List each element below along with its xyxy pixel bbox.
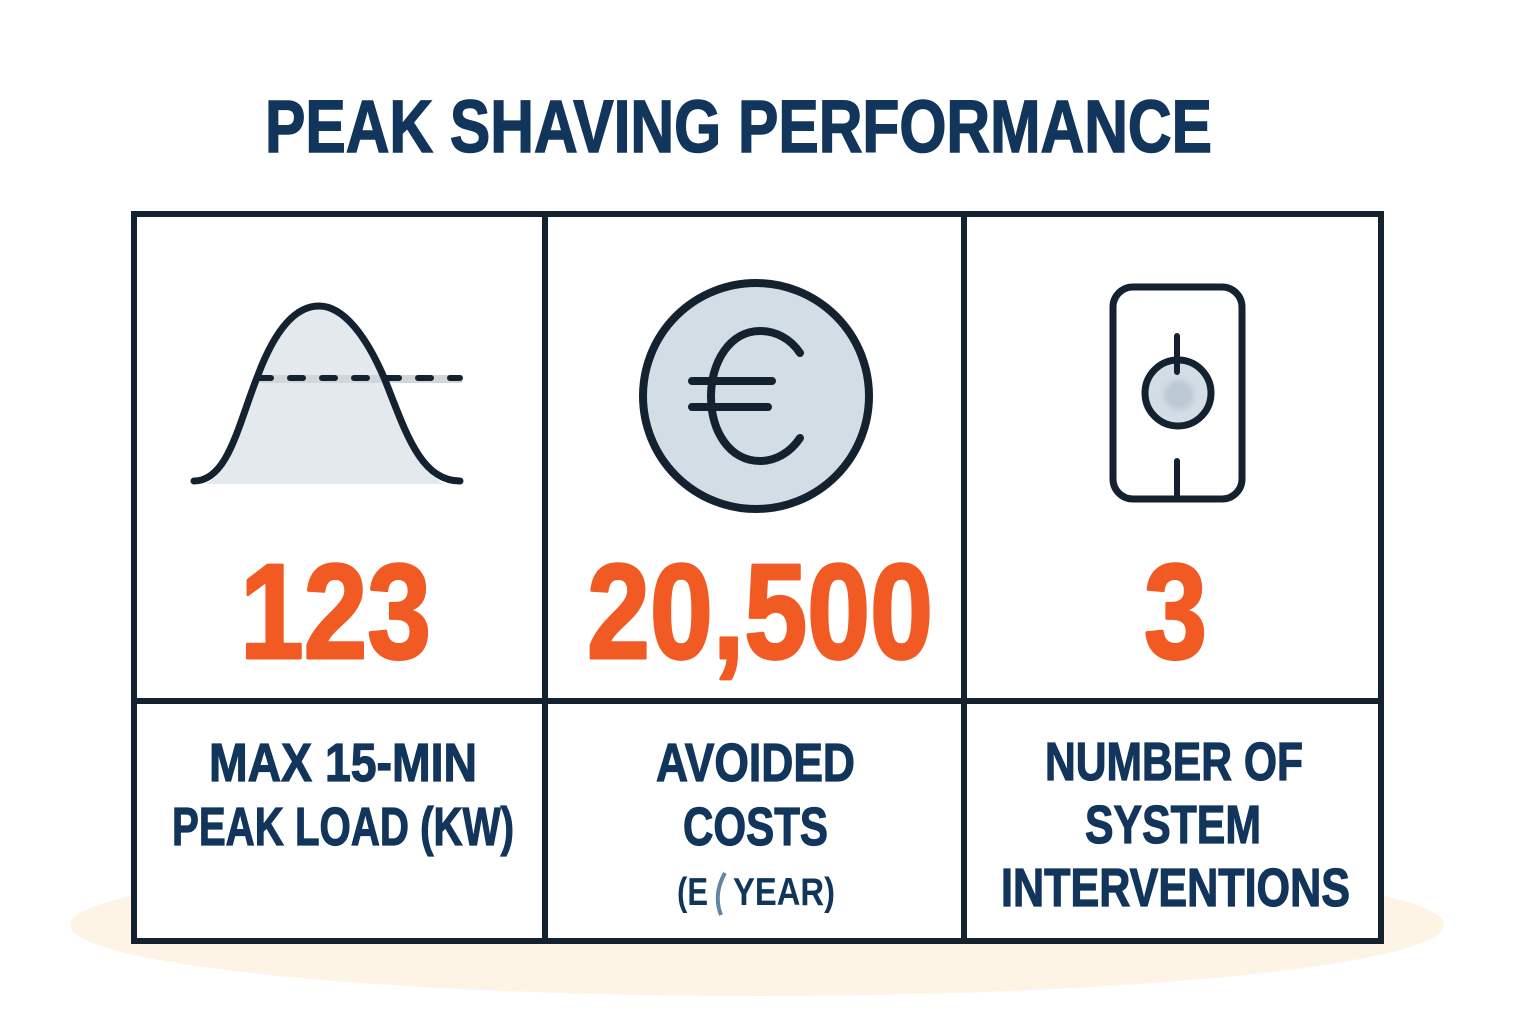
background ellipse [70,854,1444,996]
icon: euro coin [643,283,869,509]
label: avoided costs: (E [677,871,708,914]
value: peak load: 123 [240,536,431,687]
metrics table [134,214,1381,941]
label: avoided costs: AVOIDED [656,733,855,793]
label: avoided costs [656,733,855,915]
label: peak load: MAX 15-MIN [209,733,477,793]
label: interventions [1001,732,1350,918]
label: interventions: INTERVENTIONS [1001,858,1350,918]
value: interventions: 3 [1144,536,1207,687]
label: avoided costs: COSTS [683,797,828,857]
icon: system switch [1113,287,1242,499]
label: peak load: PEAK LOAD (KW) [172,797,514,857]
icon: peak load curve [194,306,462,484]
label: interventions: SYSTEM [1085,795,1261,855]
label: avoided costs: YEAR) [733,871,835,914]
label: peak load [172,733,514,857]
title: PEAK SHAVING PERFORMANCE [265,85,1212,168]
label: interventions: NUMBER OF [1045,732,1303,792]
value: avoided costs: 20,500 [587,536,933,687]
